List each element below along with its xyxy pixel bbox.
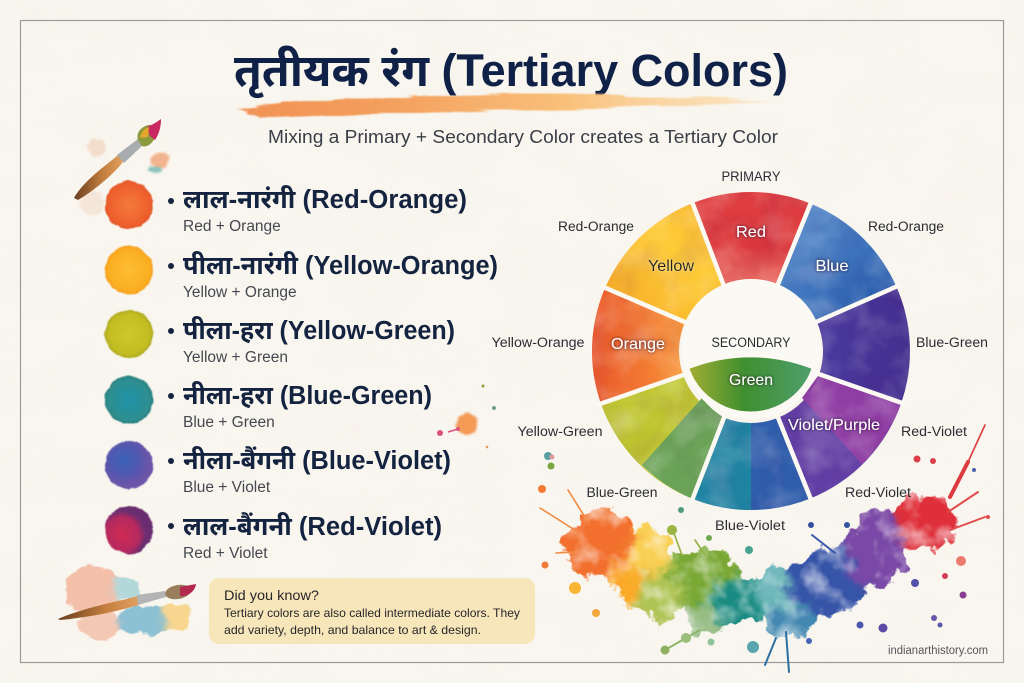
segment: violet purple [778, 374, 901, 498]
wheel dividers [597, 199, 905, 503]
small splash left of wheel [544, 452, 554, 470]
item: red-violet [105, 506, 442, 562]
item: blue-violet: Blue + Violet [183, 479, 271, 496]
segment: teal and blue [693, 418, 811, 510]
item: blue-violet [105, 441, 451, 496]
item: yellow-orange: पीला-नारंगी (Yellow-Orange) [183, 251, 498, 280]
callout: did you know: Tertiary colors are also called intermediate colors. They [224, 606, 520, 620]
item: yellow-orange [105, 246, 498, 301]
outer labels: Red-Violet [901, 424, 967, 439]
watercolor mottling [592, 192, 910, 510]
wheel labels [611, 224, 880, 434]
segment: blue [778, 204, 896, 322]
wheel labels: Red [736, 224, 766, 241]
item: yellow-green [105, 310, 455, 366]
outer labels: Blue-Violet [715, 518, 785, 533]
icon: paint brush top [74, 119, 169, 216]
green center lens [688, 356, 813, 413]
item: blue-green: Blue + Green [183, 414, 275, 431]
segment: yellow green [601, 375, 725, 499]
small orange splash [437, 384, 496, 448]
outer labels: Blue-Green [586, 485, 658, 500]
color list [105, 181, 498, 562]
color wheel [592, 192, 910, 510]
outer labels: Red-Orange [558, 219, 634, 234]
wheel labels: Blue [816, 258, 849, 275]
outer labels: Yellow-Orange [492, 335, 584, 350]
item: red-violet: Red + Violet [183, 545, 268, 562]
wheel labels: Orange [611, 336, 665, 353]
item: yellow-green: पीला-हरा (Yellow-Green) [183, 316, 455, 345]
outer labels: PRIMARY [722, 169, 780, 184]
item: yellow-orange: Yellow + Orange [183, 284, 297, 301]
watercolor splash bottom right [538, 425, 990, 672]
item: blue-violet: नीला-बैंगनी (Blue-Violet) [183, 446, 451, 475]
item: blue-green [105, 376, 432, 431]
item: red-orange [105, 181, 467, 235]
website credit: indianarthistory.com [888, 645, 988, 657]
title: तृतीयक रंग (Tertiary Colors) [234, 45, 788, 98]
wheel labels: Yellow [648, 258, 694, 275]
icon: paint brush and splash bottom left [58, 567, 196, 639]
outer labels: Yellow-Green [518, 424, 602, 439]
outer labels: Red-Violet [845, 485, 911, 500]
item: red-orange: Red + Orange [183, 218, 281, 235]
segment: red [693, 192, 811, 284]
item: red-violet: लाल-बैंगनी (Red-Violet) [183, 512, 442, 541]
subtitle: Mixing a Primary + Secondary Color creates a Tertiary Color [268, 127, 778, 147]
callout: did you know: Did you know? [224, 588, 319, 603]
item: yellow-green: Yellow + Green [183, 349, 288, 366]
segment: deep violet [817, 286, 910, 403]
segment: orange [592, 288, 685, 404]
brush stroke underline [236, 94, 788, 118]
outer labels: Blue-Green [916, 335, 988, 350]
callout: did you know: add variety, depth, and balance to art & design. [224, 623, 481, 637]
segment: yellow [605, 203, 725, 322]
wheel labels: Violet/Purple [788, 417, 880, 434]
outer labels: Red-Orange [868, 219, 944, 234]
item: blue-green: नीला-हरा (Blue-Green) [183, 381, 432, 410]
item: red-orange: लाल-नारंगी (Red-Orange) [183, 185, 467, 214]
outer labels [492, 169, 988, 533]
center hole [681, 279, 821, 419]
wheel labels: SECONDARY [712, 335, 790, 350]
callout: did you know [209, 578, 535, 644]
wheel labels: Green [729, 372, 773, 389]
